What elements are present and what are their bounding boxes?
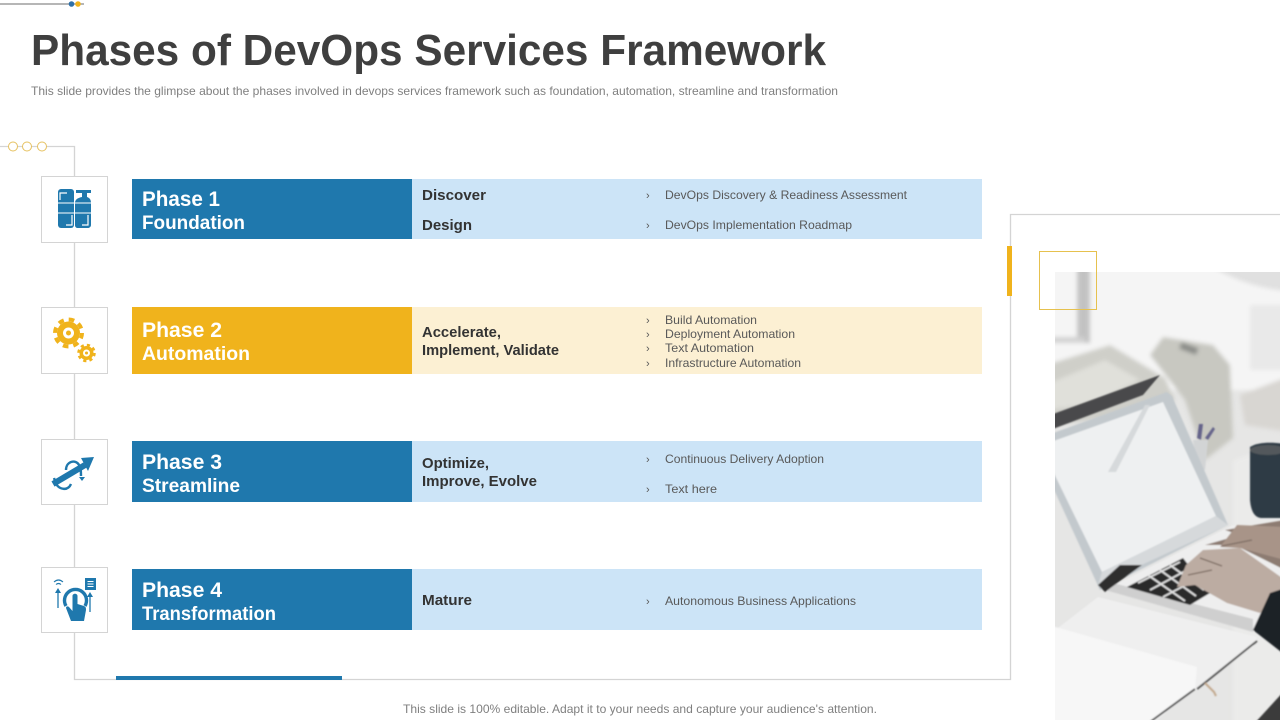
panel: phase 2: Text Automation: [665, 341, 754, 355]
panel: phase 3: Improve, Evolve: [422, 473, 537, 490]
sleeve: [1253, 588, 1280, 655]
frame ornament: three circles: [8, 142, 46, 151]
panel: phase 2: Automation: [142, 344, 250, 365]
panel: phase 1: DevOps Implementation Roadmap: [665, 218, 852, 232]
panel: phase 3: ›: [646, 484, 650, 496]
panel: phase 2: [132, 307, 982, 374]
panel: phase 1: [132, 179, 982, 239]
panel: phase 2: Infrastructure Automation: [665, 356, 801, 370]
laptop back: [1055, 374, 1160, 430]
icon box: streamline: [42, 440, 108, 504]
yellow accent bar: [1007, 246, 1012, 296]
panel: phase 2: ›: [646, 358, 650, 370]
panel: phase 2: Deployment Automation: [665, 327, 795, 341]
panel: phase 1: Design: [422, 217, 472, 234]
panel: phase 3: Phase 3: [142, 451, 222, 474]
footer note: This slide is 100% editable. Adapt it to your needs and capture your audience's attention.: [403, 702, 877, 716]
hands: [1220, 525, 1280, 560]
keyboard: [1127, 558, 1210, 605]
top-left ornament: [0, 1, 84, 7]
panel: phase 3: [132, 441, 982, 502]
panel: phase 2: ›: [646, 343, 650, 355]
panel: phase 4: Mature: [422, 592, 472, 609]
photo: laptop on desk: [1040, 255, 1280, 720]
panel: phase 3: ›: [646, 454, 650, 466]
frame lines: [0, 146, 1280, 680]
laptop frame and screen: [1045, 392, 1228, 590]
blue accent bar: [116, 676, 342, 680]
panel: phase 4: Transformation: [142, 604, 276, 625]
panel: phase 1: ›: [646, 190, 650, 202]
panel: phase 3: Continuous Delivery Adoption: [665, 452, 824, 466]
panel: phase 3: Optimize,: [422, 455, 489, 472]
panel: phase 4: ›: [646, 596, 650, 608]
panel: phase 1: Discover: [422, 187, 486, 204]
panel: phase 3: Text here: [665, 482, 717, 496]
icon: bottles: [58, 189, 91, 228]
panel: phase 3: Streamline: [142, 476, 240, 497]
subtitle: This slide provides the glimpse about the phases involved in devops services framework such as foundation, automation, streamline and transformation: [31, 84, 838, 98]
desk corner: [1256, 694, 1280, 720]
panel: phase 1: Foundation: [142, 213, 245, 234]
panel: phase 1: ›: [646, 220, 650, 232]
panel: phase 2: ›: [646, 315, 650, 327]
panel: phase 1: DevOps Discovery & Readiness Assessment: [665, 188, 908, 202]
yellow outline square: [1040, 252, 1096, 310]
panel: phase 2: Build Automation: [665, 313, 757, 327]
laptop base: [1105, 525, 1280, 632]
panel: phase 4: [132, 569, 982, 630]
icon: touch with gear and arrows: [54, 578, 96, 621]
panel: phase 2: ›: [646, 329, 650, 341]
icon box: automation: [42, 308, 108, 374]
icon box: transformation: [42, 568, 108, 632]
panel: phase 2: Implement, Validate: [422, 342, 559, 359]
panel: phase 2: Phase 2: [142, 319, 222, 342]
icon: rising arrow with loop: [53, 457, 94, 489]
panel: phase 1: Phase 1: [142, 188, 220, 211]
panel: phase 4: Phase 4: [142, 579, 222, 602]
title: Phases of DevOps Services Framework: [31, 26, 827, 75]
icon: gears: [55, 320, 94, 361]
cup: [1250, 443, 1280, 518]
icon box: foundation: [42, 176, 108, 242]
panel: phase 4: Autonomous Business Applications: [665, 594, 856, 608]
notebook: [1060, 598, 1256, 708]
panel: phase 2: Accelerate,: [422, 324, 501, 341]
